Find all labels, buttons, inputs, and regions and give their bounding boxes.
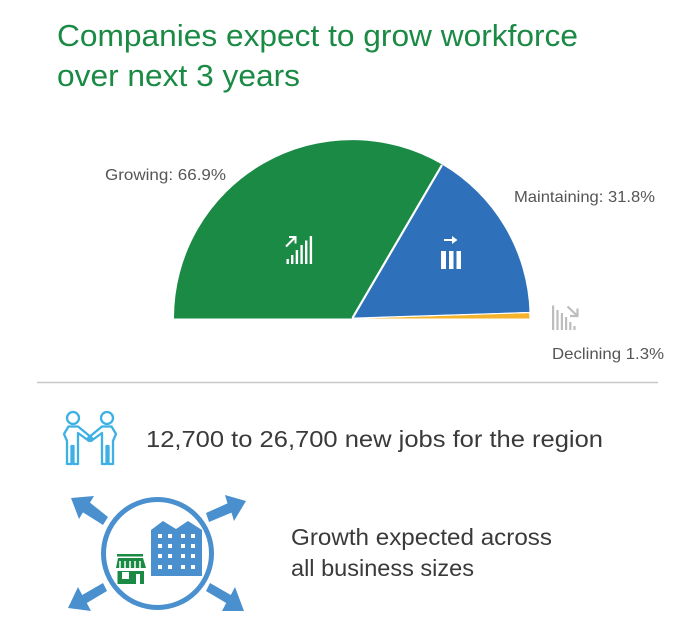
label: maintaining: Maintaining: 31.8% [514,189,655,206]
arrow: south-east [206,583,244,611]
arrow: south-west [68,583,107,611]
label: growing: Growing: 66.9% [105,167,226,184]
semicircle pie chart [174,140,530,318]
icon: handshake people [64,412,116,464]
building [151,521,202,576]
icon: maintaining bars [441,236,461,269]
icon: declining bars [552,306,578,330]
arrow: north-west [71,496,108,525]
text: growth expected [291,524,552,581]
text: growth expected: Growth expected across [291,524,552,550]
slice: maintaining [352,164,530,318]
shop [116,554,146,584]
title [57,18,578,93]
slice: growing [174,140,442,318]
label: declining: Declining 1.3% [552,346,664,363]
title: Companies expect to grow workforce [57,18,578,53]
slice: declining [362,313,530,318]
text: growth expected: all business sizes [291,555,474,581]
circle [104,500,212,608]
arrow: north-east [206,495,246,522]
icon: business growth [68,495,246,611]
title: over next 3 years [57,58,300,93]
text: new jobs: 12,700 to 26,700 new jobs for the region [146,426,603,452]
icon: growing bars [286,236,312,264]
